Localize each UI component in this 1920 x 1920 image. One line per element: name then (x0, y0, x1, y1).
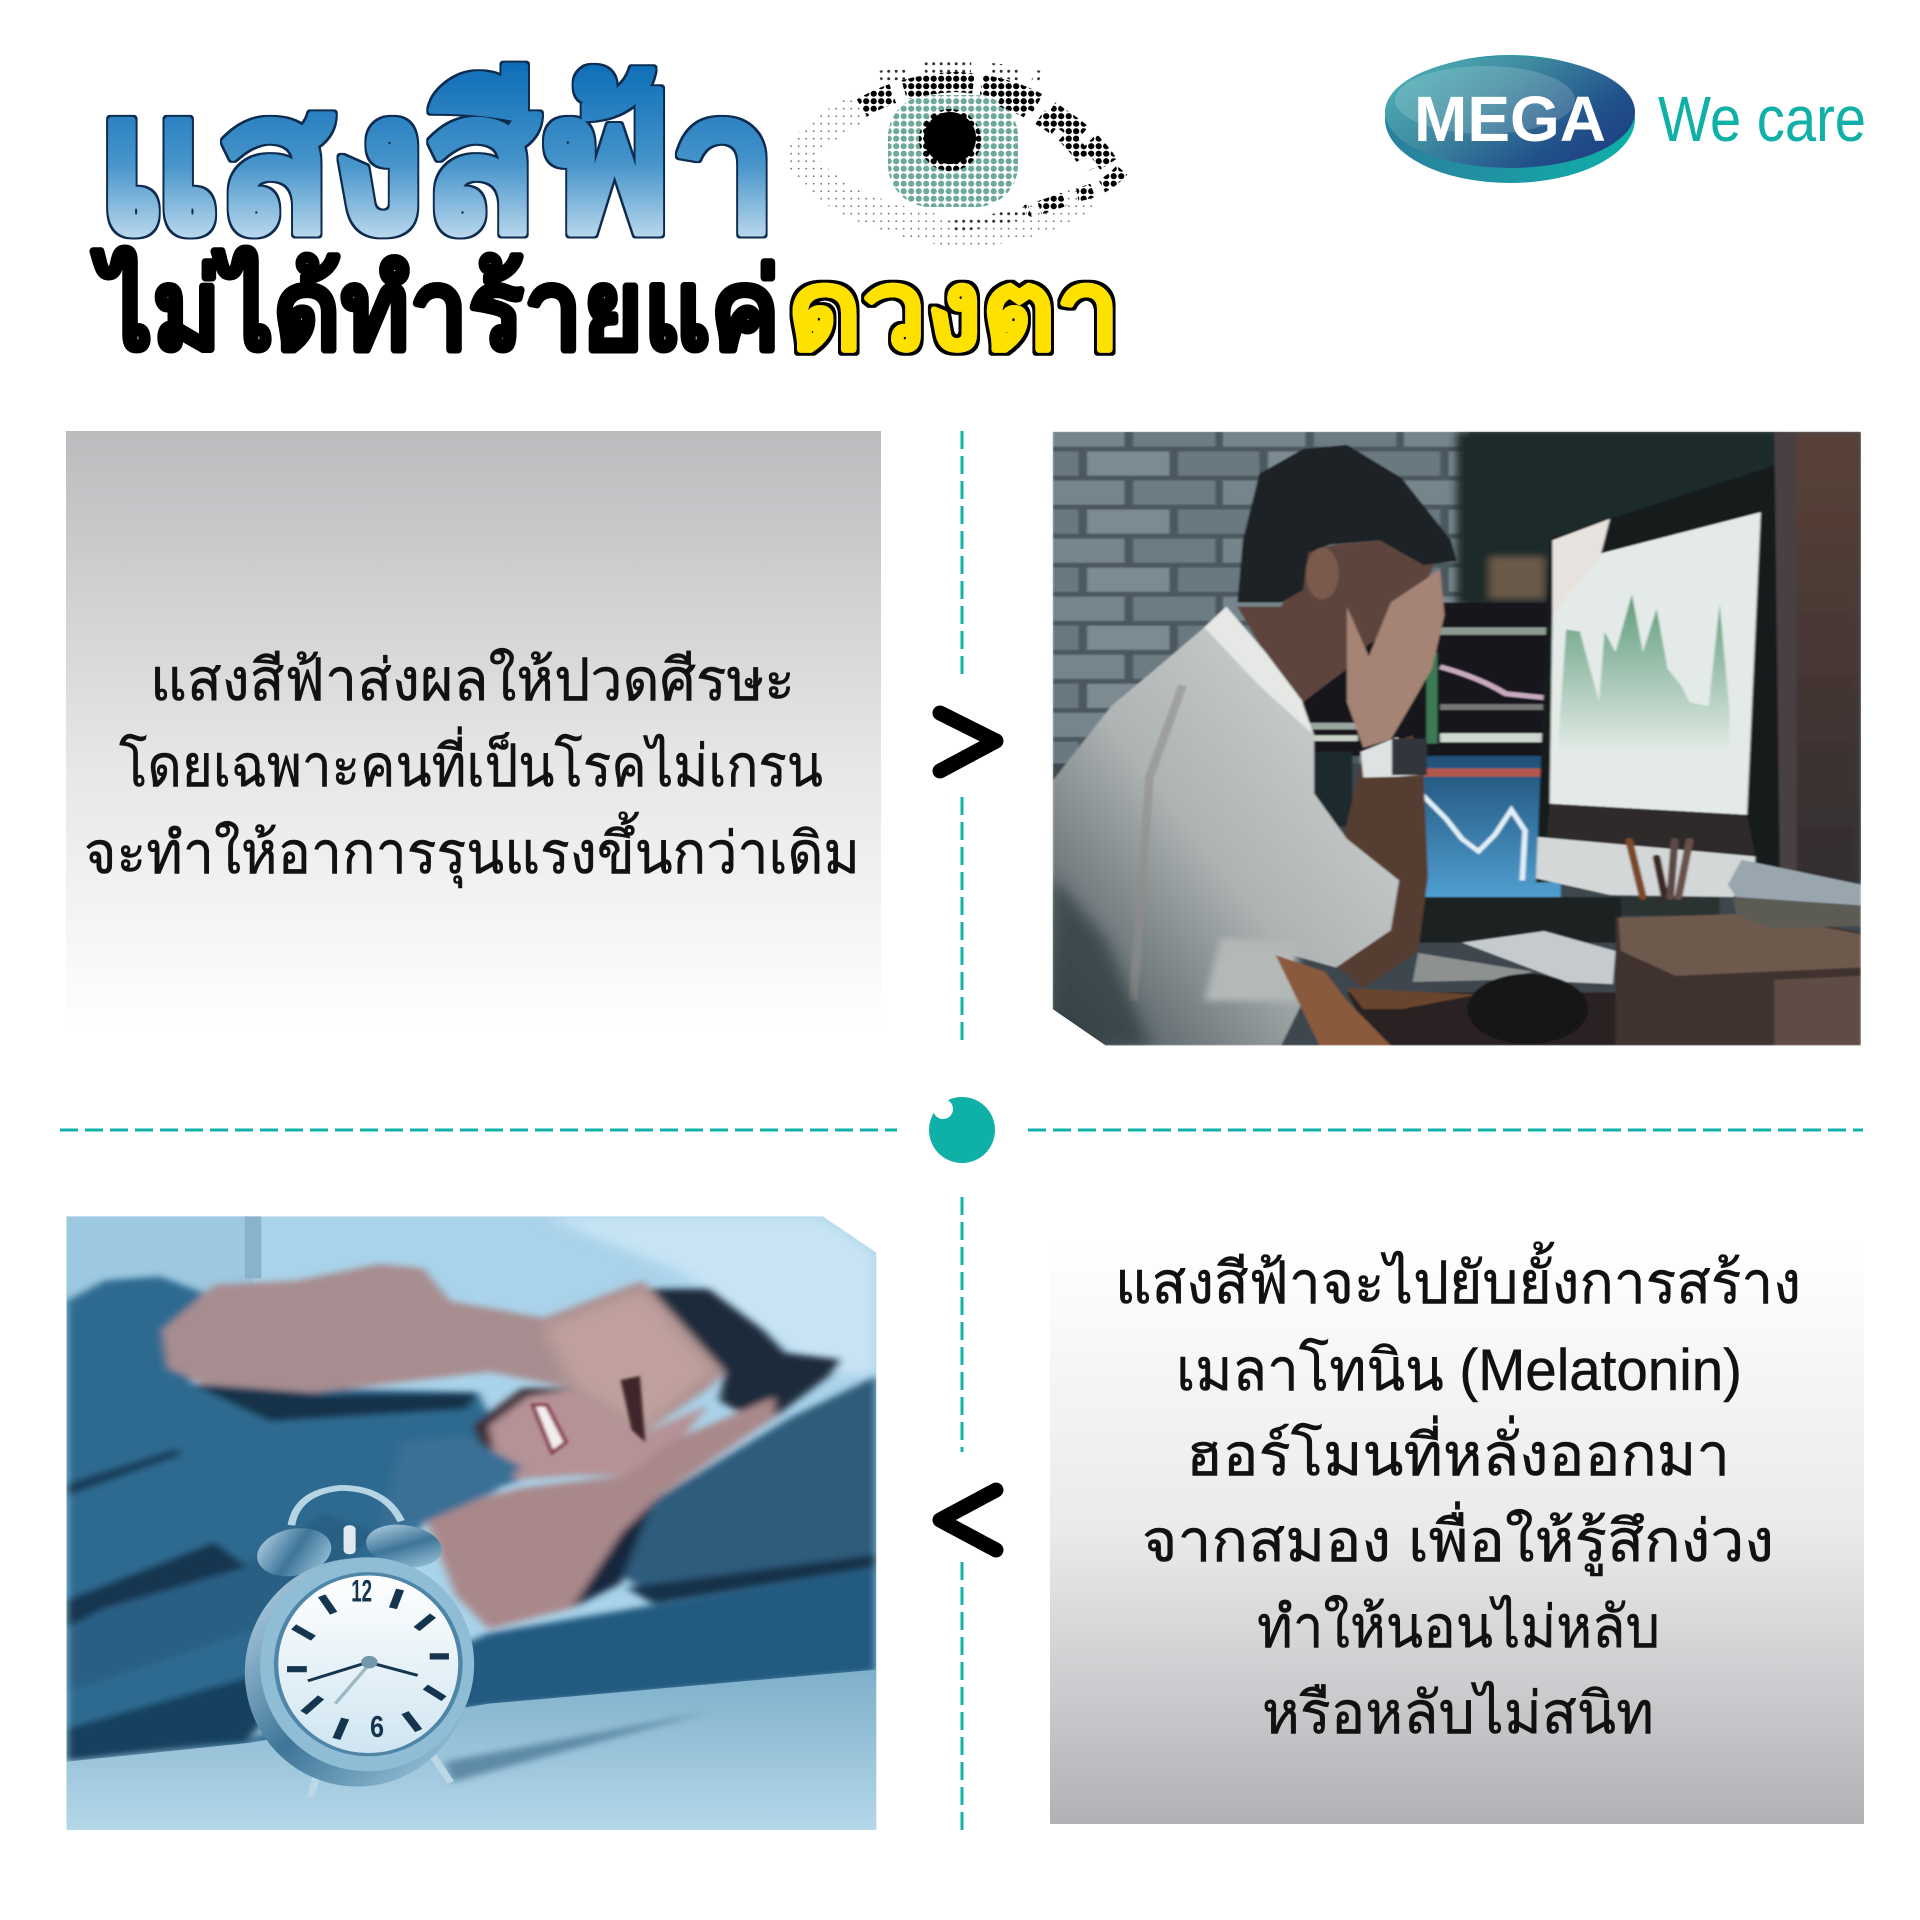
bedside table (66, 1670, 876, 1830)
panel: melatonin text (1050, 1240, 1864, 1824)
panel: headache text: แสงสีฟ้าส่งผลให้ปวดศีรษะ (150, 647, 795, 713)
logo: We care: We care (1658, 83, 1866, 155)
title: second line: ไม่ได้ทำร้ายแค่ (91, 247, 780, 373)
arrow: less than (940, 1490, 996, 1550)
panel: headache text: โดยเฉพาะคนที่เป็นโรคไม่เกรน (119, 726, 823, 799)
panel: headache text (66, 431, 881, 1031)
back monitor (1303, 603, 1555, 756)
arrow: greater than (940, 713, 996, 771)
panel: headache text: จะทำให้อาการรุนแรงขึ้นกว่าเดิม (84, 812, 860, 889)
man: shirt (1053, 607, 1399, 1046)
photo: woman awake by alarm clock: 6 (370, 1710, 384, 1744)
clock (291, 1488, 401, 1525)
logo: MEGA oval (1385, 55, 1635, 183)
desk and objects (1347, 992, 1621, 1046)
panel: melatonin text: ฮอร์โมนที่หลั่งออกมา (1186, 1415, 1730, 1488)
title: second line: ดวงตา (788, 248, 1120, 373)
blue monitor (1418, 756, 1561, 897)
divider: dashed cross (60, 431, 1863, 1830)
logo: MEGA oval: MEGA (1414, 83, 1606, 155)
icon: eye dot (929, 1097, 995, 1163)
icon: halftone eye (800, 68, 1122, 232)
panel: melatonin text: หรือหลับไม่สนิท (1262, 1680, 1654, 1746)
main monitor (1536, 466, 1794, 883)
panel: melatonin text: จากสมอง เพื่อให้รู้สึกง่วง (1142, 1501, 1774, 1576)
panel: melatonin text: แสงสีฟ้าจะไปยับยั้งการสร้าง (1115, 1242, 1801, 1316)
panel: melatonin text: ทำให้นอนไม่หลับ (1257, 1594, 1660, 1660)
title: blue headline: แสงสีฟ้า (97, 59, 777, 271)
photo: stressed man at monitors (1052, 432, 1861, 1046)
man: head (1237, 540, 1440, 702)
photo: woman awake by alarm clock (66, 1216, 876, 1830)
panel: melatonin text: เมลาโทนิน (Melatonin) (1176, 1337, 1742, 1403)
man: forearm (1339, 735, 1428, 988)
photo: woman awake by alarm clock: 12 (351, 1574, 372, 1609)
